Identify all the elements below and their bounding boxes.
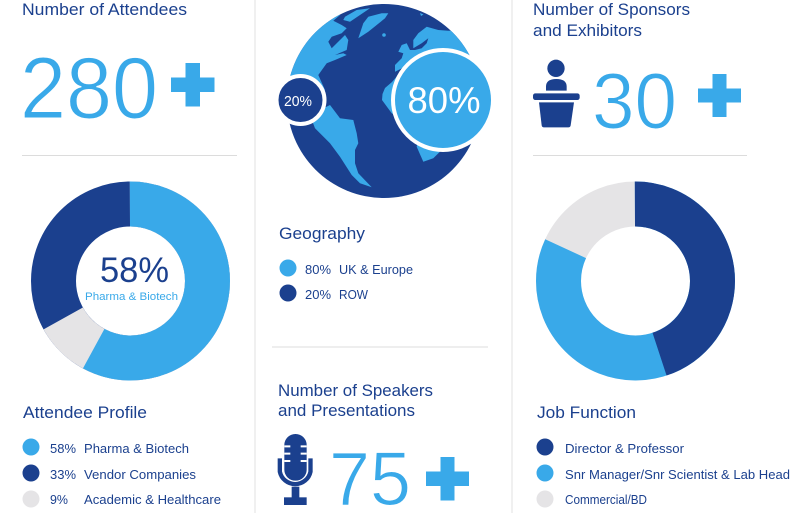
legend: job function [536,438,790,508]
bubble: 80% [393,50,493,150]
heading: number of speakers and presentations [278,381,433,420]
legend: geography: 20% [305,287,331,302]
heading: job function: Job Function [537,403,636,422]
globe with percentage bubbles [276,4,493,198]
legend: job function: Commercial/BD [565,492,647,507]
heading: number of speakers and presentations: and Presentations [278,401,415,420]
legend: attendee profile: 58% [50,441,76,456]
legend: geography [280,260,413,302]
donut chart: attendee profile [54,204,208,358]
legend: attendee profile: 33% [50,467,76,482]
legend: geography: UK & Europe [339,262,413,277]
legend: job function: Snr Manager/Snr Scientist & Lab Head [565,467,790,482]
stat: 30+: 30 [592,56,677,145]
legend: attendee profile: Academic & Healthcare [84,492,221,507]
stat: 30+ [592,56,741,145]
stat: 75+ [329,437,469,513]
legend: attendee profile: 9% [50,492,68,507]
legend: attendee profile: Pharma & Biotech [84,441,189,456]
heading: attendee profile: Attendee Profile [23,403,147,422]
heading: number of attendees: Number of Attendees [22,0,187,19]
bubble: 80%: 80% [408,80,480,121]
donut chart: job function [558,204,712,358]
legend: geography: 80% [305,262,331,277]
heading: number of sponsors and exhibitors: Number of Sponsors [533,0,690,19]
legend: job function: Director & Professor [565,441,685,456]
legend: attendee profile [22,438,221,508]
bubble: 20%: 20% [284,93,312,110]
stat: 280+: 280 [20,40,158,137]
heading: geography: Geography [279,224,365,243]
legend: geography: ROW [339,287,369,302]
legend: attendee profile: Vendor Companies [84,467,196,482]
icon: microphone [280,434,310,505]
icon: speaker at podium [533,60,580,127]
donut chart: attendee profile: Pharma & Biotech [85,291,178,303]
heading: number of sponsors and exhibitors [533,0,690,40]
heading: number of sponsors and exhibitors: and Exhibitors [533,21,642,40]
donut chart: attendee profile: 58% [100,251,169,290]
heading: number of speakers and presentations: Number of Speakers [278,381,433,400]
bubble: 20% [276,76,324,124]
